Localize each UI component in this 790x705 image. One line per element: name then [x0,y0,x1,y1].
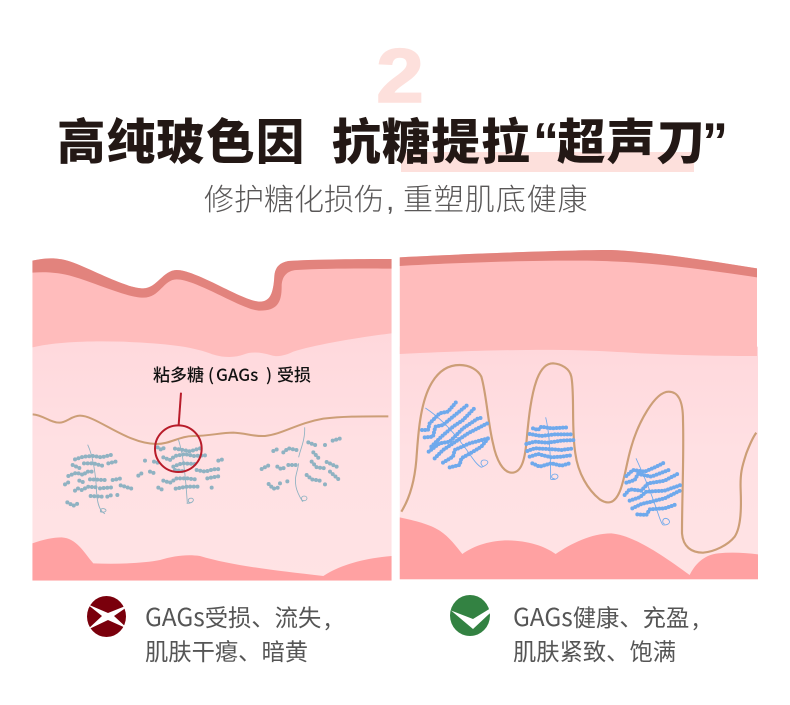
skin base layer [32,333,392,581]
skin base layer [400,347,758,579]
title: 高纯玻色因 [57,103,306,173]
callout: GAGs damage marker [155,393,202,472]
epidermis layer [32,258,392,357]
title: 抗糖提拉 [332,103,531,173]
callout label: GAGs [216,361,258,386]
lower dermis layer [32,537,392,581]
caption: healthy [513,599,699,667]
callout label [153,361,311,386]
dermal papillae line [401,363,756,553]
title: “ [533,113,559,171]
GAGs cluster: healthy 1 [422,401,489,467]
caption: healthy: 肌肤紧致、饱满 [513,633,676,667]
lower dermis layer [400,517,758,579]
callout label: ) [266,361,272,386]
caption: damaged [145,599,331,667]
subtitle [204,175,588,219]
subtitle: 重塑肌底健康 [403,175,588,219]
panel: healthy skin [400,250,758,579]
title: ” [702,113,728,171]
GAGs cluster: damaged 3 [262,427,341,502]
surface skin band [400,250,757,277]
GAGs cluster: damaged 1 [65,445,132,514]
title [57,103,728,173]
caption: damaged: 肌肤干瘪、暗黄 [145,633,308,667]
panel: damaged skin [32,258,392,581]
GAGs cluster: healthy 2 [526,417,575,480]
subtitle: , [386,184,394,217]
title highlight bar [401,152,694,172]
caption: damaged: GAGs受损、流失, [145,599,331,634]
GAGs cluster: damaged 2 [138,439,225,503]
epidermis layer [400,250,757,356]
icon: damaged cross [87,596,133,637]
subtitle: 修护糖化损伤 [204,175,384,219]
title: 超声刀 [557,103,706,173]
caption: healthy: GAGs健康、充盈, [513,599,699,634]
GAGs cluster: healthy 3 [625,458,681,525]
callout label: 受损 [277,361,311,386]
callout label: ( [208,361,214,386]
basement membrane line [33,414,388,444]
icon: healthy check [450,595,504,636]
callout label: 粘多糖 [153,361,204,386]
surface skin band [32,258,392,311]
large number 2: 2 [376,35,424,119]
